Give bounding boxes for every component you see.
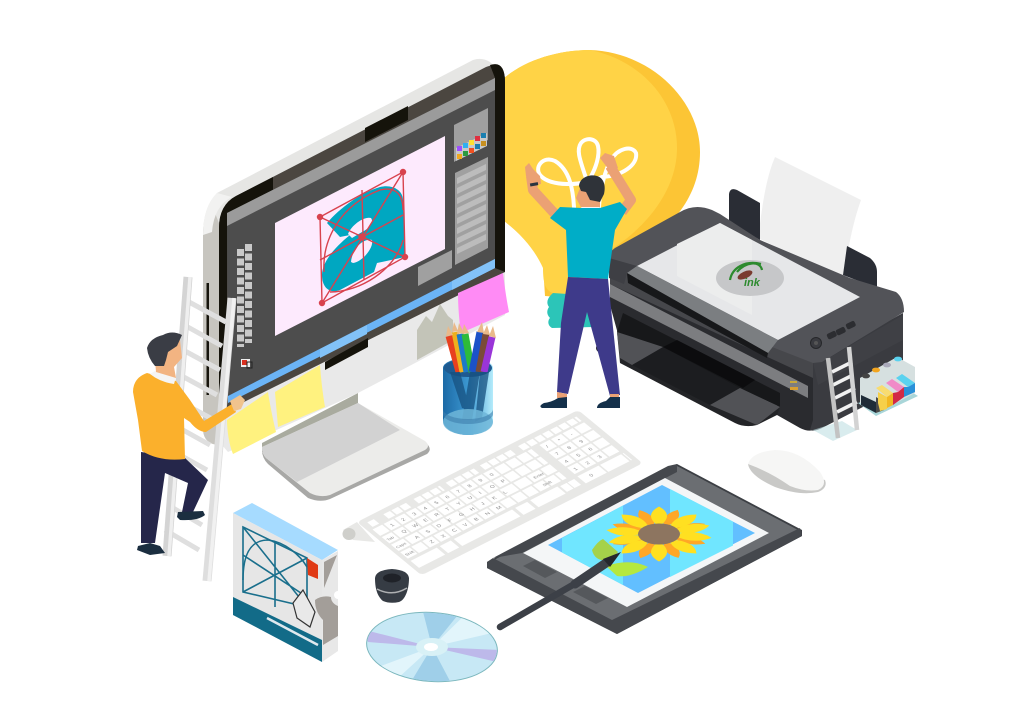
pink sticky note — [458, 273, 509, 333]
pen nib icon — [293, 590, 315, 627]
keyboard: ASDFGHJKL — [414, 490, 509, 540]
tool keypad — [240, 244, 248, 347]
teal band — [233, 597, 322, 662]
pencil cup — [443, 322, 496, 435]
shoes — [137, 511, 205, 555]
screen — [227, 78, 495, 398]
right side face — [810, 313, 903, 431]
yellow sticky note left — [227, 392, 276, 454]
sunflower — [605, 506, 713, 562]
ankle skin — [557, 392, 619, 398]
keyboard: 456 — [563, 447, 595, 464]
hand — [230, 395, 245, 411]
red tool icon — [241, 359, 252, 368]
ink jar — [375, 569, 409, 603]
shoes — [540, 397, 620, 408]
stand base — [262, 403, 430, 501]
left end of the keyboard body — [343, 522, 375, 542]
numpad — [543, 425, 589, 448]
collar — [150, 371, 176, 384]
software box — [233, 503, 342, 662]
tall ladder — [165, 277, 234, 581]
leaves — [592, 539, 618, 561]
letter rows — [386, 460, 544, 540]
keyboard: Tab — [385, 535, 396, 542]
layers panel — [455, 157, 488, 265]
pencils — [449, 332, 492, 372]
filament — [538, 139, 636, 207]
number row — [376, 452, 535, 533]
canvas — [275, 136, 445, 336]
hands — [525, 153, 618, 186]
paper tray — [617, 332, 780, 426]
compact disc — [366, 612, 498, 682]
blue status strip — [228, 259, 495, 403]
sweater — [133, 373, 236, 460]
ink tanks — [858, 357, 918, 416]
printer — [596, 157, 918, 441]
bezel — [219, 65, 505, 410]
logo disc — [716, 260, 784, 296]
hinge roll — [342, 528, 356, 540]
bulb base — [547, 293, 596, 328]
computer mouse — [748, 450, 826, 493]
yellow sticky note right — [275, 365, 325, 427]
small panel — [418, 250, 452, 286]
trousers — [141, 452, 208, 543]
red square — [307, 558, 318, 579]
foot behind the trousers — [596, 343, 608, 353]
teal letter a — [322, 186, 405, 291]
trousers — [557, 277, 620, 396]
illustration: graphic design workspace — [133, 50, 918, 682]
paper — [523, 478, 769, 607]
keyboard — [342, 410, 643, 575]
man changing the bulb — [525, 153, 631, 408]
shirt — [550, 202, 627, 279]
keyboard: ZXCVBNM — [429, 505, 504, 545]
box side cutout — [315, 555, 338, 645]
space row — [415, 490, 562, 564]
drawing tablet — [487, 464, 802, 634]
stand neck — [262, 393, 358, 452]
vector lines — [243, 527, 307, 607]
head — [576, 188, 600, 209]
keyboard: Caps — [394, 541, 407, 549]
vector construction lines — [318, 170, 408, 306]
light bulb — [500, 50, 700, 328]
dark shade and bar — [627, 266, 778, 353]
logo disc: ink — [744, 277, 761, 289]
chin — [222, 268, 505, 452]
keyboard: Shift — [541, 480, 554, 487]
arrows — [564, 482, 578, 489]
paper guides — [729, 189, 760, 240]
function row — [370, 419, 579, 525]
front face — [610, 252, 813, 431]
rear silver frame — [203, 59, 505, 445]
keyboard: /*- — [545, 432, 575, 449]
keyboard: 789 — [554, 439, 585, 457]
keyboard: Shift — [404, 549, 416, 557]
keyboard: 123 — [573, 455, 604, 472]
stylus pen — [500, 552, 621, 627]
man on ladder — [133, 332, 245, 555]
keyboard: 0 — [588, 473, 595, 478]
keyboard: 1234567890 — [389, 473, 496, 528]
small ladder — [813, 347, 857, 441]
head — [155, 340, 182, 378]
glass — [637, 223, 860, 340]
notch — [334, 591, 342, 599]
colour palette panel — [454, 108, 488, 162]
paper — [758, 157, 861, 280]
artwork — [548, 485, 755, 593]
keyboard: QWERTYUIOP — [400, 479, 508, 535]
tablet buttons — [523, 560, 608, 604]
keyboard: Enter — [532, 471, 546, 479]
top face — [609, 207, 904, 363]
computer monitor — [203, 59, 509, 501]
control buttons — [810, 320, 856, 348]
arms — [531, 166, 631, 214]
